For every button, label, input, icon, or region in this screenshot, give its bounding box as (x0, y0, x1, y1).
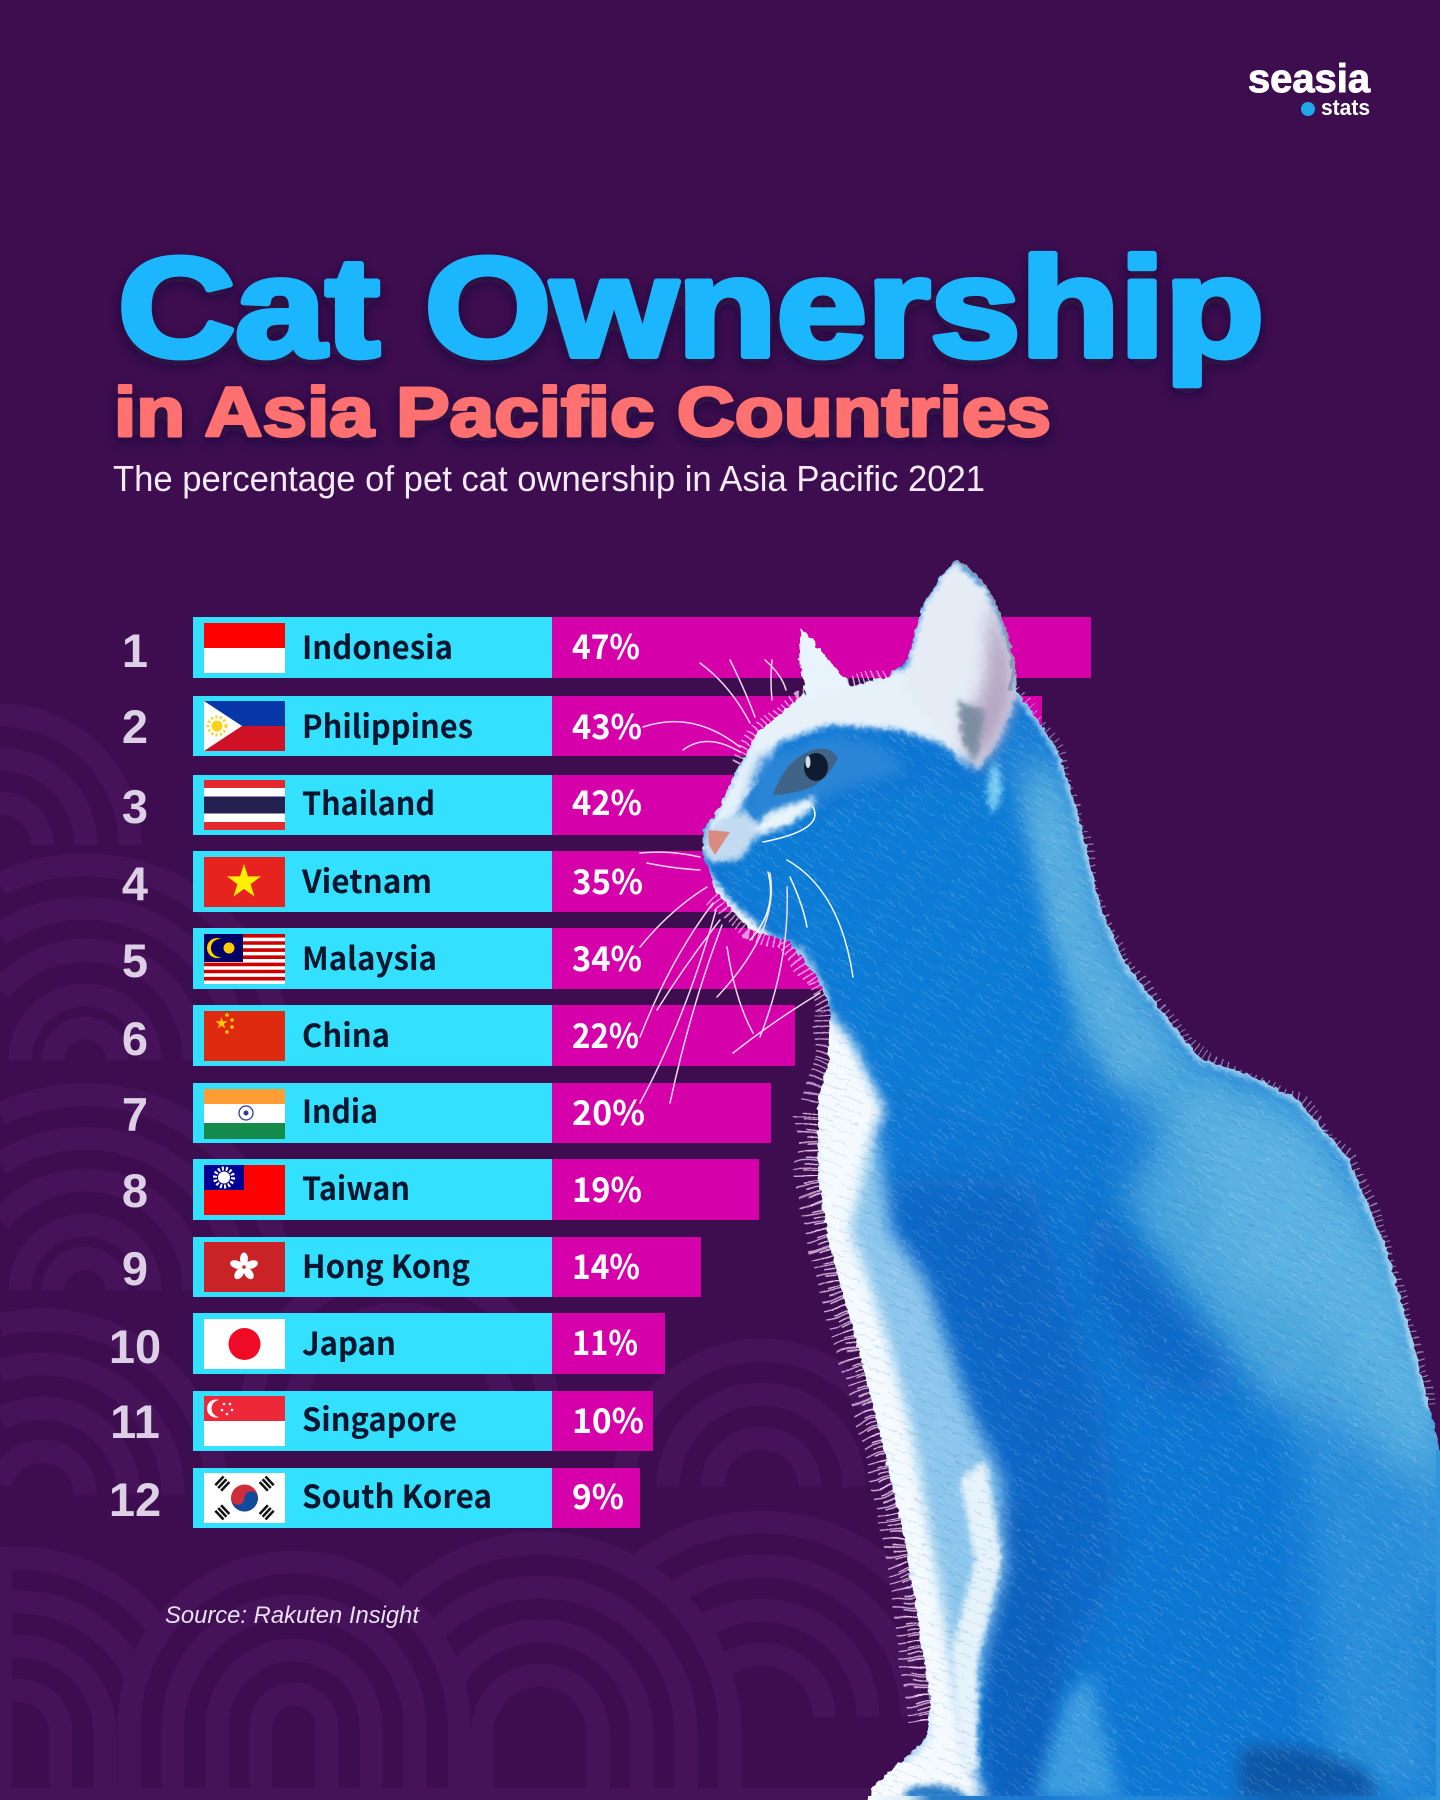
cat eye (773, 749, 838, 795)
logo: seasia stats: stats (1321, 95, 1370, 120)
flag: Indonesia (204, 623, 285, 673)
flag: Japan (204, 1319, 285, 1369)
illustration: blue cat (640, 550, 1440, 1800)
row 12: South Korea (109, 1468, 640, 1528)
row 11: Singapore: Singapore (302, 1395, 457, 1441)
row 7: India: 20% (572, 1086, 645, 1135)
row 11: Singapore (110, 1391, 653, 1451)
row 12: South Korea: 9% (572, 1470, 624, 1519)
row 1: Indonesia (122, 617, 1091, 678)
row 5: Malaysia: 5 (122, 934, 148, 987)
row 4: Vietnam: 4 (122, 857, 148, 910)
row 7: India: India (302, 1087, 378, 1133)
row 8: Taiwan: 8 (122, 1164, 148, 1217)
row 3: Thailand: 42% (572, 776, 642, 825)
flag: Vietnam (204, 857, 285, 907)
row 6: China (122, 1005, 795, 1066)
cat nose (708, 830, 730, 855)
cat bottom edge (868, 1450, 1440, 1800)
flag: India (204, 1089, 285, 1139)
cat fur spikes (717, 676, 1430, 1720)
flag: Philippines (204, 701, 285, 751)
row 2: Philippines: 43% (572, 700, 642, 749)
logo: seasia stats: seasia (1248, 57, 1371, 101)
row 10: Japan: 11% (572, 1316, 638, 1365)
row 1: Indonesia: 47% (572, 620, 640, 669)
flag: South Korea (204, 1473, 285, 1523)
cat whiskers (640, 660, 853, 1103)
source note: Source: Rakuten Insight (165, 1602, 420, 1629)
row 1: Indonesia: Indonesia (302, 623, 453, 669)
row 6: China: China (302, 1011, 390, 1057)
row 2: Philippines (122, 696, 1042, 756)
cat body (690, 550, 1440, 1800)
row 2: Philippines: 2 (122, 700, 148, 753)
title: Cat Ownership (118, 228, 1264, 386)
flag: Hong Kong (204, 1242, 285, 1292)
flag: Malaysia (204, 934, 285, 984)
row 9: Hong Kong (122, 1237, 701, 1297)
description: The percentage of pet cat ownership in Asia Pacific 2021 (113, 458, 985, 499)
row 10: Japan (109, 1313, 665, 1374)
row 6: China: 6 (122, 1012, 148, 1065)
row 3: Thailand: 3 (122, 780, 148, 833)
row 1: Indonesia: 1 (122, 624, 148, 677)
row 4: Vietnam: 35% (572, 855, 643, 904)
flag: Singapore (204, 1396, 285, 1446)
subtitle heading: in Asia Pacific Countries (114, 373, 1051, 451)
row 3: Thailand: Thailand (302, 779, 435, 825)
row 5: Malaysia (122, 928, 942, 989)
row 5: Malaysia: 34% (572, 932, 642, 981)
row 4: Vietnam (122, 851, 953, 912)
row 10: Japan: 10 (109, 1320, 161, 1373)
row 12: South Korea: South Korea (302, 1472, 492, 1518)
flag: Thailand (204, 780, 285, 830)
flag: China (204, 1011, 285, 1061)
row 4: Vietnam: Vietnam (301, 857, 432, 903)
row 8: Taiwan: Taiwan (302, 1164, 410, 1210)
row 8: Taiwan (122, 1159, 759, 1220)
row 9: Hong Kong: Hong Kong (302, 1242, 470, 1288)
row 3: Thailand (122, 775, 1033, 835)
row 7: India: 7 (122, 1088, 148, 1141)
row 9: Hong Kong: 9 (122, 1242, 148, 1295)
row 9: Hong Kong: 14% (572, 1240, 640, 1289)
row 2: Philippines: Philippines (302, 702, 473, 748)
row 8: Taiwan: 19% (572, 1163, 642, 1212)
row 11: Singapore: 10% (572, 1394, 644, 1443)
row 6: China: 22% (572, 1009, 639, 1058)
background pattern: concentric arcs (0, 715, 956, 1800)
row 12: South Korea: 12 (109, 1473, 161, 1526)
row 10: Japan: Japan (302, 1319, 396, 1365)
logo: seasia stats (1248, 57, 1371, 120)
row 7: India (122, 1083, 771, 1143)
row 5: Malaysia: Malaysia (302, 934, 437, 980)
flag: Taiwan (204, 1165, 285, 1215)
row 11: Singapore: 11 (110, 1395, 160, 1448)
